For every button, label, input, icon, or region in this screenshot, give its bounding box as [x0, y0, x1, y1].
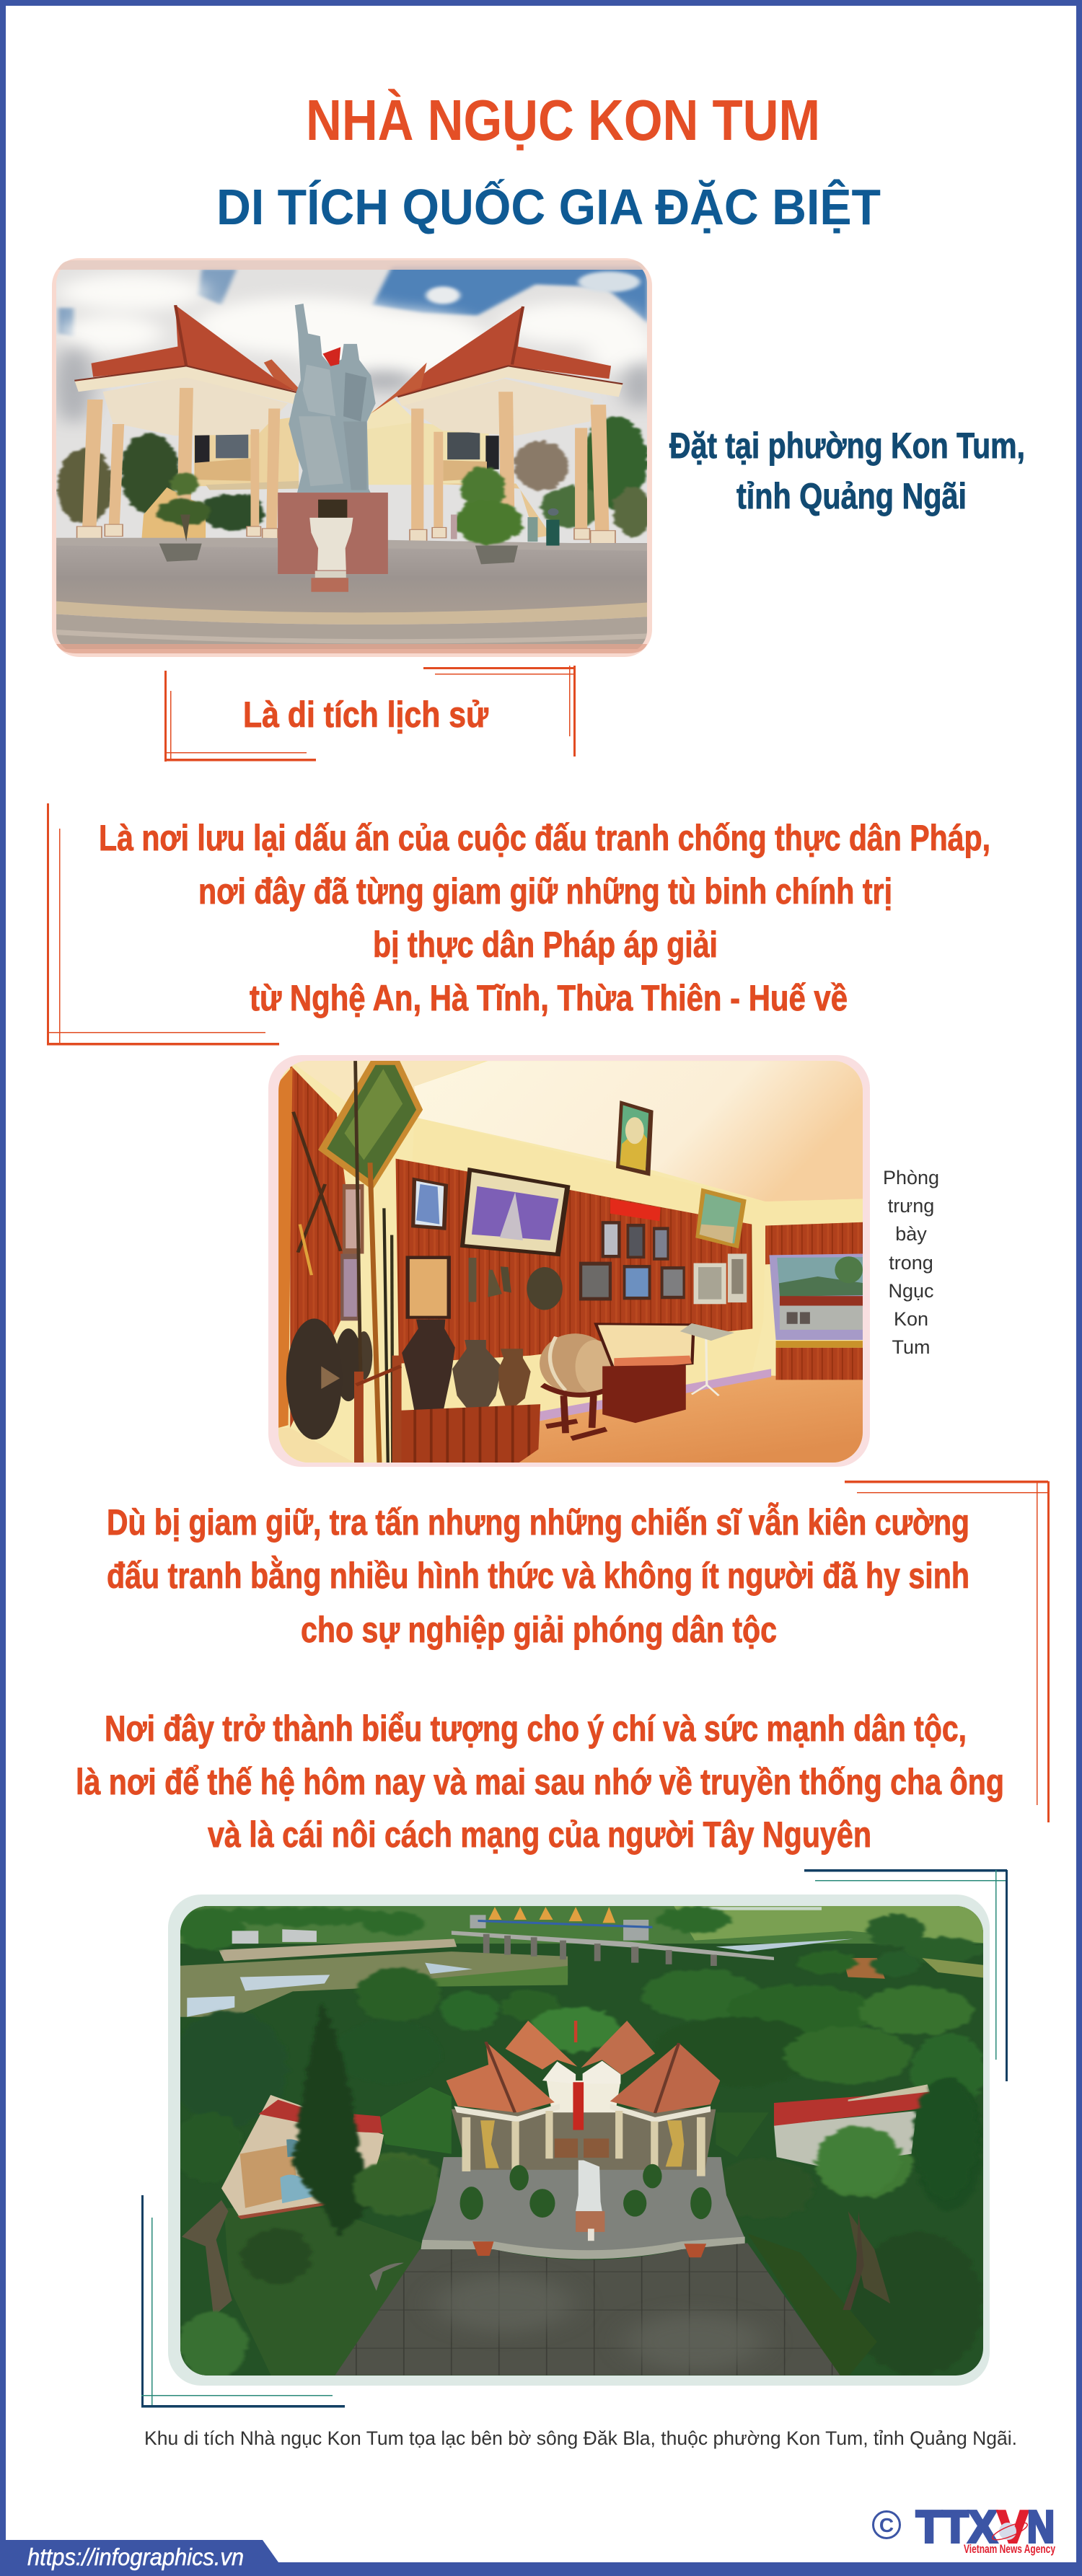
background trees — [58, 416, 652, 537]
paragraph 2 — [76, 1708, 1004, 1855]
purple painting — [460, 1168, 571, 1256]
text block: struggle against colonial rule — [47, 803, 990, 1046]
green painting — [695, 1188, 747, 1248]
text boards — [694, 1263, 726, 1304]
left red wall — [290, 1065, 346, 1428]
photo caption: exhibition room: Kon — [894, 1308, 928, 1330]
text block: resistance and symbol — [76, 1481, 1050, 1855]
right wall and display case — [765, 1222, 864, 1264]
courtyard — [423, 2157, 745, 2258]
photo caption: exhibition room: trong — [889, 1252, 933, 1274]
title line 2: DI TÍCH QUỐC GIA ĐẶC BIỆT — [216, 178, 881, 235]
label box: historic site — [164, 666, 576, 762]
small portraits — [579, 1221, 685, 1300]
wordmark: V — [998, 2502, 1028, 2552]
left far trees — [177, 1906, 983, 1963]
title — [216, 88, 881, 235]
rear building — [194, 416, 299, 486]
corner lines — [845, 1481, 1050, 1822]
paragraph: nơi đây đã từng giam giữ những tù binh chính trị — [198, 871, 892, 912]
paragraph 1 — [107, 1502, 969, 1650]
floor — [484, 1375, 864, 1463]
spears and rack — [356, 1061, 362, 1463]
label text: Là di tích lịch sử — [243, 694, 489, 735]
logo: TTXVN — [873, 2502, 1055, 2556]
title line 1: NHÀ NGỤC KON TUM — [306, 88, 820, 152]
crossed sticks — [294, 1112, 340, 1253]
corner lines: top right — [804, 1869, 1008, 2081]
pedestal — [278, 493, 388, 574]
left pavilion ceiling and roof — [103, 376, 288, 436]
glass case — [596, 1324, 694, 1370]
corner lines: bottom left — [141, 2195, 345, 2407]
plaza and steps — [56, 543, 648, 613]
photo panel: exhibition room — [267, 1053, 873, 1471]
corner lines — [164, 666, 576, 762]
bonsai — [460, 2164, 711, 2220]
left hanging frames — [343, 1184, 364, 1253]
diamond painting — [318, 1060, 423, 1190]
river — [177, 1951, 568, 2017]
globe — [990, 2520, 1029, 2543]
columns — [82, 388, 609, 531]
location text: tỉnh Quảng Ngãi — [736, 476, 967, 516]
corner lines — [47, 803, 279, 1046]
left building — [221, 2095, 384, 2216]
statue — [576, 2160, 602, 2211]
central pavilion — [452, 2109, 716, 2170]
artifacts and gong — [469, 1258, 476, 1302]
plaza — [335, 2243, 840, 2376]
photo caption: exhibition room: Tum — [892, 1336, 931, 1358]
mid foliage — [171, 1951, 985, 2182]
copyright mark: C — [879, 2514, 894, 2536]
photo panel: monument and pavilions — [50, 256, 658, 657]
lawn and path — [224, 2208, 423, 2377]
portrait of President — [616, 1100, 654, 1176]
portrait — [411, 1178, 448, 1230]
certificate — [406, 1256, 451, 1319]
red banner — [610, 1199, 661, 1221]
wordmark — [916, 2502, 1055, 2552]
paragraph — [99, 818, 990, 1018]
gongs — [356, 1331, 372, 1380]
paragraph: bị thực dân Pháp áp giải — [373, 925, 718, 965]
drum — [540, 1333, 611, 1393]
photo caption: exhibition room — [883, 1167, 939, 1358]
soft photo frame bands — [56, 260, 647, 653]
photo panel: aerial view — [141, 1869, 1008, 2407]
urn — [309, 518, 353, 570]
paragraph: từ Nghệ An, Hà Tĩnh, Thừa Thiên - Huế về — [250, 978, 848, 1018]
footer tab — [6, 2540, 361, 2576]
paragraph 1: cho sự nghiệp giải phóng dân tộc — [301, 1610, 777, 1650]
photo caption: exhibition room: Ngục — [888, 1280, 934, 1302]
far fields — [166, 1902, 992, 1944]
plinth — [401, 1404, 540, 1463]
footer url: https://infographics.vn — [27, 2544, 244, 2570]
bridge — [623, 1920, 648, 1941]
embankment — [219, 1938, 457, 1961]
wordmark: N — [1027, 2502, 1055, 2552]
main red wall — [396, 1159, 752, 1364]
pine tree — [293, 2001, 444, 2236]
location text — [669, 425, 1025, 516]
right building — [774, 2111, 917, 2166]
photo caption: exhibition room: bày — [895, 1223, 927, 1245]
statue — [289, 304, 376, 493]
right pavilion ceiling and roof — [402, 379, 594, 436]
wordmark: TTX — [916, 2502, 997, 2552]
bonsai — [157, 467, 560, 564]
photo caption: exhibition room: trưng — [888, 1195, 934, 1217]
jars — [402, 1319, 455, 1421]
copyright mark — [873, 2511, 900, 2538]
paragraph 2: và là cái nôi cách mạng của người Tây Nguyên — [208, 1814, 871, 1855]
photo caption: exhibition room: Phòng — [883, 1167, 939, 1188]
white stand — [692, 1331, 719, 1395]
lower right foliage — [179, 2078, 983, 2378]
photo caption: aerial view: Khu di tích Nhà ngục Kon Tum tọa lạc bên bờ sông Đăk Bla, thuộc phường Kon Tum, tỉnh Quảng Ngãi. — [144, 2427, 1017, 2449]
